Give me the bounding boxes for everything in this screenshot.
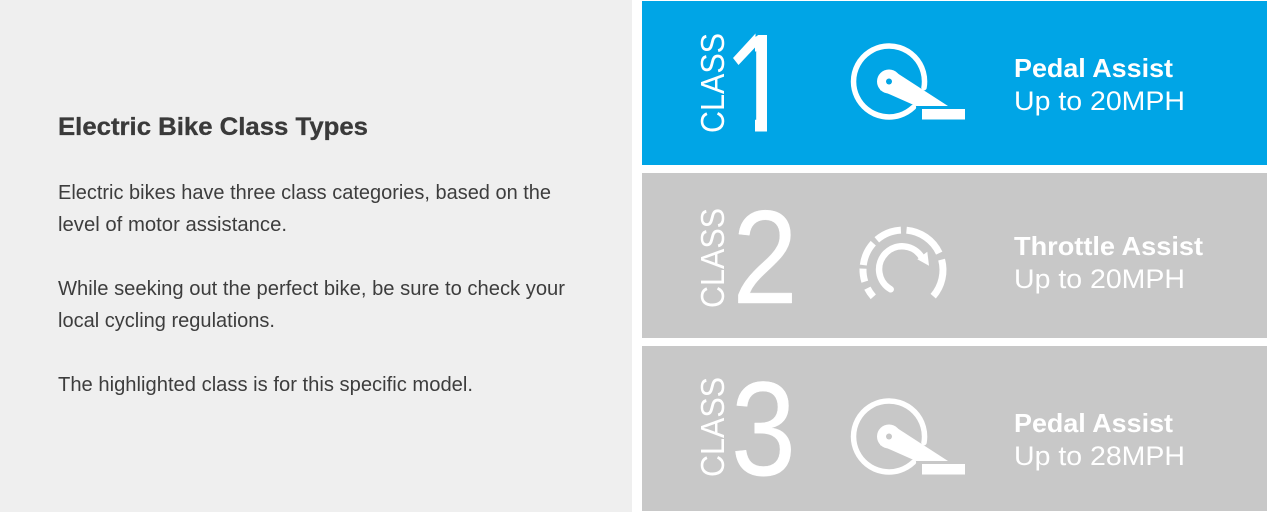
panel: introduction [0, 0, 632, 512]
text: throttle assist up to 20 mph: Up to 20MPH [1014, 264, 1185, 294]
text block: local regulations: While seeking out the perfect bike, be sure to check your [58, 278, 565, 300]
icon: pedal assist [854, 46, 965, 120]
text: pedal assist up to 20 mph: Up to 20MPH [1014, 86, 1185, 116]
class number 3: 3 [731, 353, 796, 504]
text: pedal assist up to 28 mph: Pedal Assist [1014, 408, 1173, 438]
panel: class 1 [642, 1, 1267, 165]
text: throttle assist up to 20 mph [1014, 231, 1203, 294]
class label 2: CLASS [694, 208, 731, 308]
class label 1: CLASS [694, 33, 731, 133]
text: pedal assist up to 20 mph: Pedal Assist [1014, 53, 1173, 83]
panel: class 2 [642, 173, 1267, 338]
text block: local regulations: local cycling regulations. [58, 310, 275, 332]
icon: pedal assist [854, 401, 965, 474]
text block: local regulations [58, 278, 565, 332]
text block: class categories [58, 182, 551, 236]
text: throttle assist up to 20 mph: Throttle Assist [1014, 231, 1203, 261]
text: pedal assist up to 28 mph [1014, 408, 1185, 471]
text block: highlighted class note: The highlighted class is for this specific model. [58, 374, 473, 396]
class label 3: CLASS [694, 377, 731, 477]
class number 1: 1 [723, 8, 800, 162]
text block: class categories: level of motor assistance. [58, 214, 287, 236]
heading: Electric Bike Class Types [58, 113, 368, 141]
text: pedal assist up to 28 mph: Up to 28MPH [1014, 441, 1185, 471]
icon: throttle assist [863, 230, 943, 297]
panel: class 3 [642, 346, 1267, 511]
text: pedal assist up to 20 mph [1014, 53, 1185, 116]
text block: class categories: Electric bikes have three class categories, based on the [58, 182, 551, 204]
class number 1 [733, 34, 767, 132]
class number 2: 2 [732, 183, 798, 332]
